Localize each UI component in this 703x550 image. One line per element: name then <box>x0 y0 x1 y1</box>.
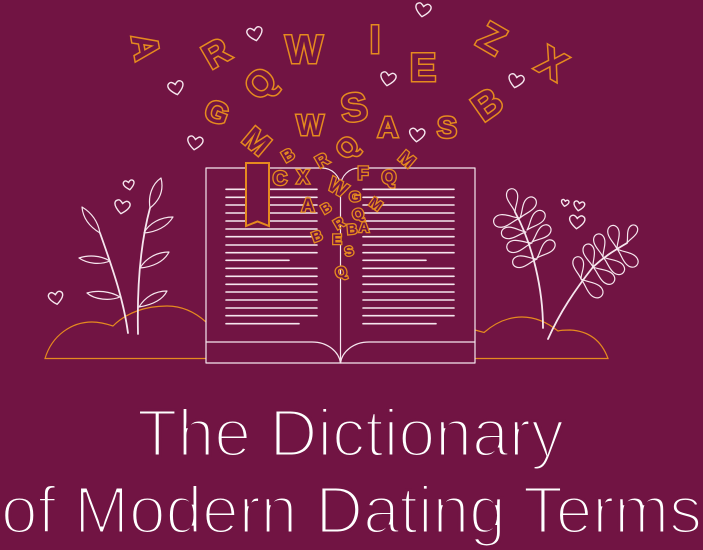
letters rising above the book: A <box>123 31 168 63</box>
letters falling into the book: F <box>358 163 368 183</box>
letters falling into the book: E <box>332 231 342 247</box>
book cover <box>206 342 475 363</box>
left plant <box>79 178 173 334</box>
letters rising above the book: Q <box>236 59 284 107</box>
right mound <box>475 317 608 358</box>
letters falling into the book: M <box>367 194 385 214</box>
letters rising above the book: G <box>200 93 233 132</box>
letters rising above the book: W <box>296 110 324 142</box>
title line one: The Dictionary <box>137 396 564 471</box>
letters falling into the book: B <box>346 220 358 237</box>
right fern plants <box>493 188 641 339</box>
letters falling into the book: B <box>279 146 298 166</box>
letters rising above the book: W <box>285 28 323 72</box>
letters falling into the book: R <box>312 149 332 172</box>
letters rising above the book: A <box>378 112 399 144</box>
letters rising above the book: Q <box>329 129 365 165</box>
book pages outline <box>206 168 475 342</box>
bookmark <box>246 163 269 226</box>
stems <box>100 208 150 334</box>
letters rising above the book <box>123 14 574 165</box>
letters falling into the book <box>273 146 419 283</box>
letters falling into the book: A <box>359 219 369 235</box>
letters rising above the book: S <box>338 84 370 132</box>
letters falling into the book: A <box>302 195 314 215</box>
letters falling into the book: G <box>349 188 361 205</box>
letters falling into the book: R <box>331 213 347 232</box>
letters rising above the book: S <box>437 112 457 144</box>
title line two: of Modern Dating Terms <box>1 473 702 548</box>
letters falling into the book: B <box>318 199 334 217</box>
hearts <box>48 2 585 306</box>
left mound <box>45 306 206 358</box>
letters rising above the book: E <box>410 46 436 90</box>
letters falling into the book: B <box>309 227 324 245</box>
letters falling into the book: M <box>395 147 419 172</box>
leaves <box>79 178 173 307</box>
letters falling into the book: W <box>324 174 351 202</box>
fern stems <box>515 212 627 339</box>
left page text lines <box>226 189 317 324</box>
letters falling into the book: Q <box>350 205 367 225</box>
fern leaves two <box>572 223 641 301</box>
letters rising above the book: Z <box>470 14 513 64</box>
letters falling into the book: X <box>297 168 310 189</box>
letters rising above the book: B <box>464 80 511 130</box>
title <box>1 396 702 548</box>
letters rising above the book: I <box>369 18 381 62</box>
letters rising above the book: X <box>529 38 574 90</box>
letters rising above the book: M <box>236 121 277 162</box>
letters falling into the book: Q <box>382 168 396 189</box>
fern leaves one <box>493 188 558 269</box>
letters rising above the book: R <box>196 30 237 77</box>
book spine <box>340 186 342 363</box>
letters falling into the book: C <box>273 168 287 190</box>
open book <box>206 168 475 363</box>
letters falling into the book: S <box>343 243 355 259</box>
right page text lines <box>363 189 454 324</box>
letters falling into the book: Q <box>333 263 350 283</box>
